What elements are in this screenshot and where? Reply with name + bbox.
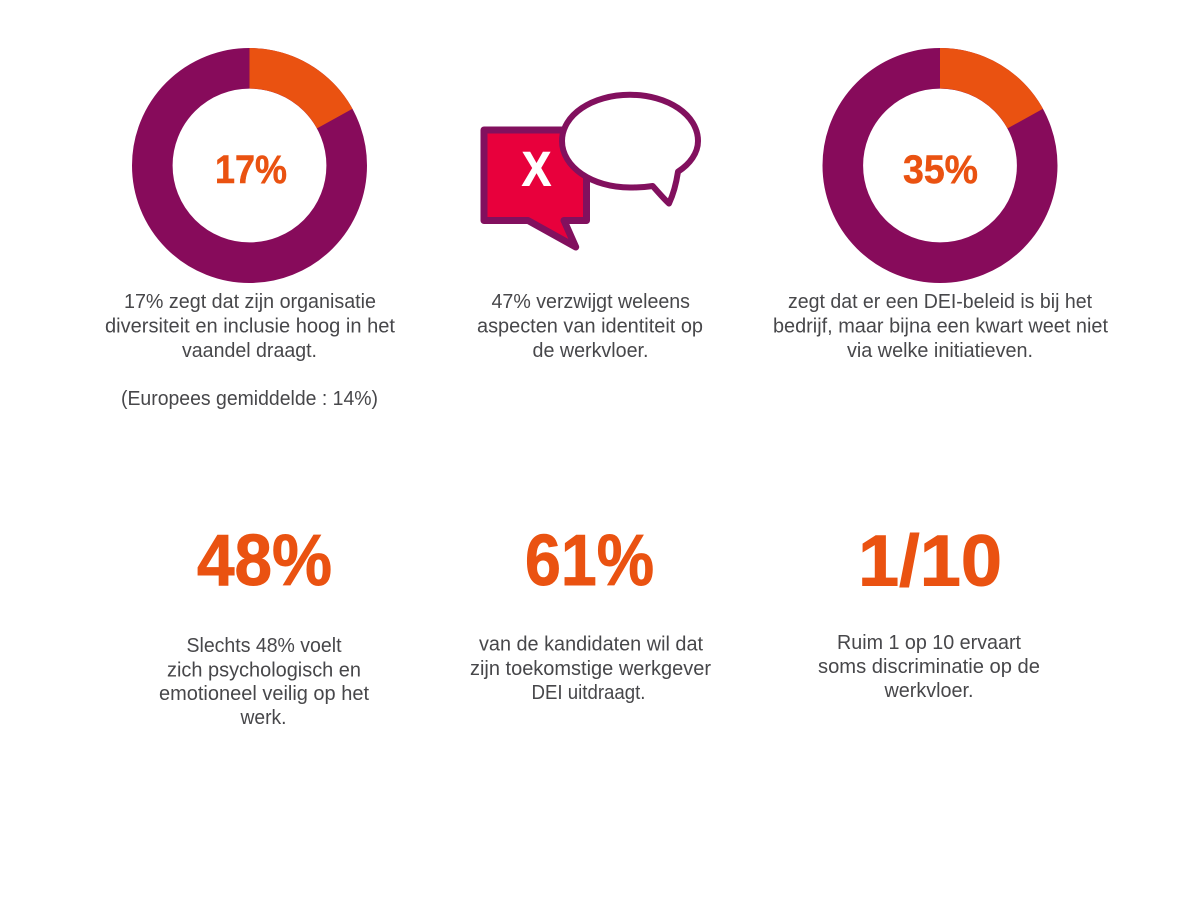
description: van de kandidaten wil dat — [479, 634, 703, 656]
description: (Europees gemiddelde : 14%) — [121, 388, 378, 410]
description: 47% verzwijgt weleens — [492, 291, 690, 313]
description: zich psychologisch en — [167, 660, 361, 682]
big number: 48% — [197, 521, 332, 601]
donut chart: 17% — [152, 48, 352, 263]
description: emotioneel veilig op het — [159, 683, 369, 705]
panel: 35% DEI policy stat — [773, 48, 1108, 362]
description — [477, 291, 703, 362]
panel: 61% candidates stat — [470, 521, 711, 704]
big number: 1/10 — [858, 522, 1002, 602]
description: zijn toekomstige werkgever — [470, 658, 711, 680]
icon: speech bubbles — [484, 95, 698, 247]
description: diversiteit en inclusie hoog in het — [105, 316, 395, 338]
panel: 47% identity stat — [477, 95, 703, 362]
description: werk. — [240, 707, 286, 729]
panel: 17% organisation stat — [105, 48, 395, 410]
donut chart: 35% — [843, 48, 1043, 263]
description — [470, 634, 711, 704]
description: via welke initiatieven. — [847, 340, 1033, 362]
icon: speech bubbles: X — [522, 144, 551, 196]
description: Slechts 48% voelt — [186, 635, 342, 657]
description: vaandel draagt. — [182, 340, 317, 362]
description: werkvloer. — [884, 680, 974, 702]
donut value: 17% — [215, 148, 287, 192]
big number: 61% — [525, 521, 654, 601]
description — [773, 291, 1108, 362]
description: DEI uitdraagt. — [532, 682, 646, 704]
description: Ruim 1 op 10 ervaart — [837, 632, 1021, 654]
donut value: 35% — [903, 148, 978, 192]
description: zegt dat er een DEI-beleid is bij het — [788, 291, 1092, 313]
description: aspecten van identiteit op — [477, 316, 703, 338]
description — [105, 291, 395, 410]
description: de werkvloer. — [532, 340, 648, 362]
description — [818, 632, 1040, 702]
description: 17% zegt dat zijn organisatie — [124, 291, 376, 313]
description: soms discriminatie op de — [818, 656, 1040, 678]
panel: 1/10 discrimination stat — [818, 522, 1040, 702]
description: bedrijf, maar bijna een kwart weet niet — [773, 316, 1108, 338]
description — [159, 635, 369, 729]
panel: 48% psychological safety stat — [159, 521, 369, 729]
